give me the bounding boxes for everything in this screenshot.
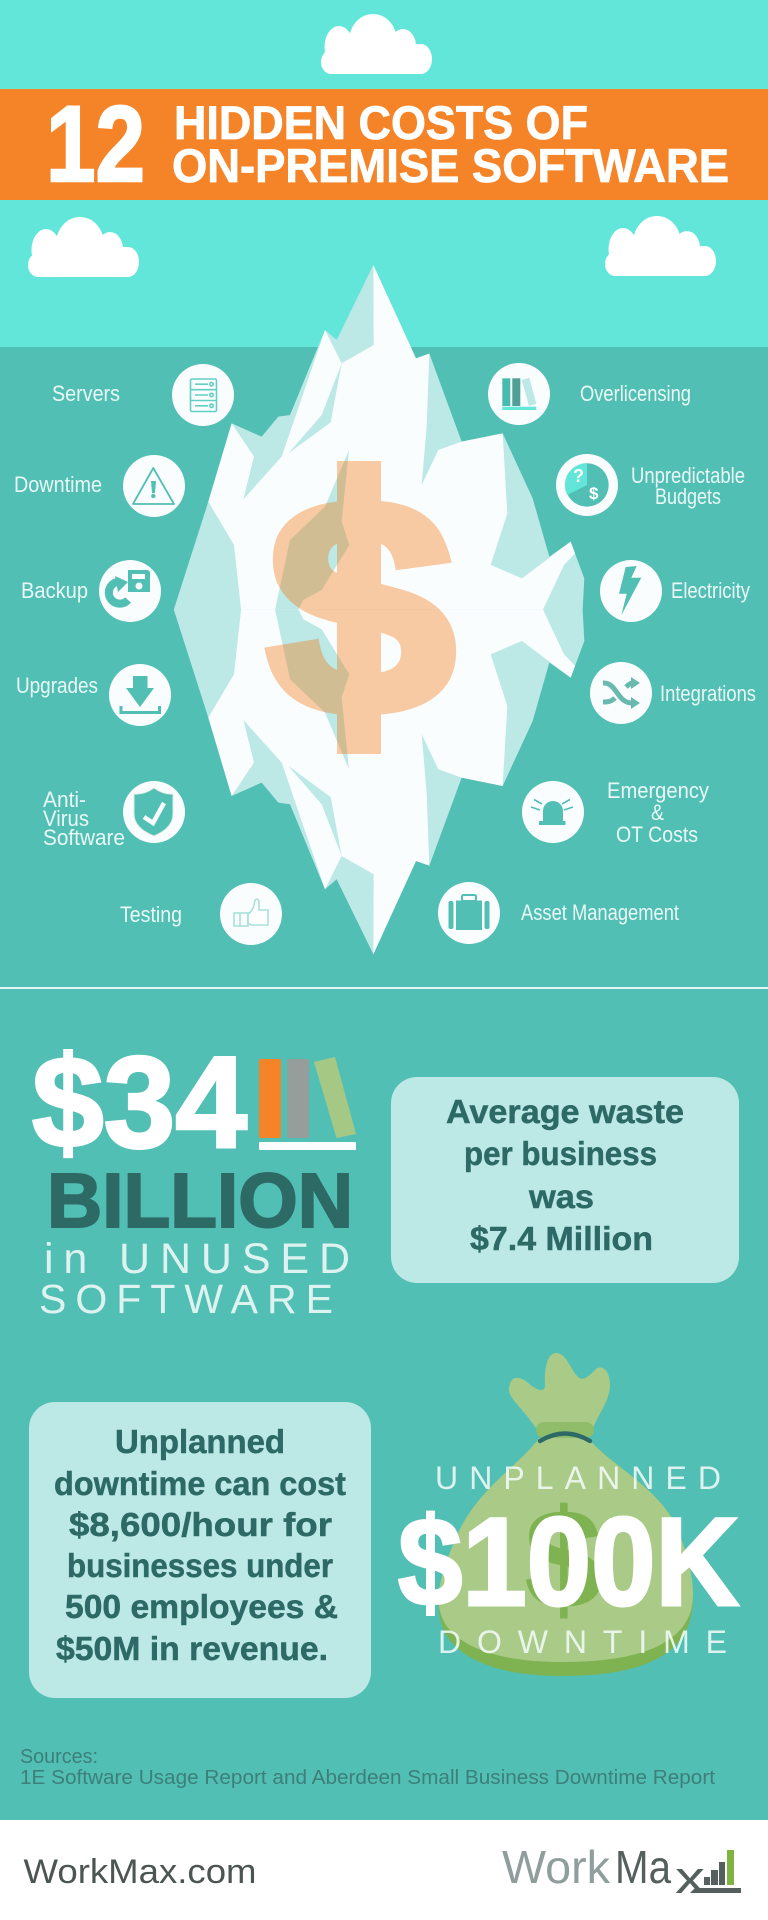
icon: money bag: $ bbox=[524, 1480, 603, 1639]
item: Testing bbox=[120, 883, 282, 945]
card: average waste bbox=[391, 1077, 739, 1283]
in unused: in UNUSED bbox=[44, 1235, 350, 1283]
item: Unpredictable Budgets bbox=[556, 454, 745, 516]
icon: budget pie: ? bbox=[573, 466, 584, 486]
cloud left bbox=[28, 217, 139, 277]
card: average waste: was bbox=[528, 1178, 594, 1215]
card: average waste: Average waste bbox=[446, 1093, 684, 1130]
stat: $34 billion: $34 bbox=[32, 1029, 247, 1175]
item: Emergency & OT Costs: OT Costs bbox=[616, 822, 698, 847]
icon: lightning bolt bbox=[600, 560, 662, 622]
sources: Sources: bbox=[20, 1746, 98, 1768]
dollar sign on iceberg: $ bbox=[267, 437, 455, 779]
card: unplanned downtime cost: Unplanned bbox=[115, 1423, 285, 1460]
icon: backup disk and arrow bbox=[99, 560, 161, 622]
icon: briefcase bbox=[438, 882, 500, 944]
website: WorkMax.com bbox=[24, 1853, 256, 1891]
card: average waste: per business bbox=[464, 1135, 657, 1172]
item: Testing: Testing bbox=[120, 902, 182, 927]
logo: WorkMax: Work bbox=[502, 1841, 611, 1893]
title number 12: 12 bbox=[46, 83, 145, 204]
item: Servers bbox=[52, 364, 234, 426]
item: Overlicensing: Overlicensing bbox=[580, 381, 691, 406]
item: Anti-Virus Software bbox=[43, 781, 185, 850]
footer bbox=[0, 1820, 768, 1920]
icon: books on shelf bbox=[259, 1057, 356, 1150]
card: unplanned downtime cost bbox=[29, 1402, 371, 1698]
logo: WorkMax: x bbox=[675, 1852, 706, 1903]
software: SOFTWARE bbox=[39, 1276, 333, 1322]
icon: books bbox=[488, 363, 550, 425]
item: Backup bbox=[21, 560, 161, 622]
item: Downtime: Downtime bbox=[14, 472, 102, 497]
stat: money bag with $100K bbox=[398, 1353, 739, 1676]
item: Backup: Backup bbox=[21, 578, 88, 603]
divider bbox=[0, 987, 768, 989]
unplanned: UNPLANNED bbox=[435, 1460, 721, 1496]
card: unplanned downtime cost: $50M in revenue. bbox=[56, 1630, 328, 1667]
stat: $34 billion bbox=[32, 1029, 356, 1322]
icon: server rack bbox=[172, 364, 234, 426]
icon: warning triangle bbox=[123, 455, 185, 517]
item: Electricity: Electricity bbox=[671, 578, 750, 603]
item: Asset Management bbox=[438, 882, 679, 944]
card: average waste: $7.4 Million bbox=[470, 1220, 653, 1257]
cloud top centre bbox=[321, 14, 432, 74]
title banner bbox=[0, 83, 768, 204]
icon: money bag bbox=[439, 1353, 693, 1676]
logo: WorkMax bbox=[502, 1841, 741, 1903]
iceberg bbox=[174, 265, 584, 954]
icon: shuffle arrows bbox=[590, 662, 652, 724]
sky background bbox=[0, 0, 768, 347]
item: Asset Management: Asset Management bbox=[521, 900, 679, 925]
title line 1: HIDDEN COSTS OF bbox=[174, 96, 588, 149]
item: Upgrades bbox=[16, 664, 171, 726]
card: unplanned downtime cost: downtime can cost bbox=[54, 1465, 346, 1502]
card: unplanned downtime cost: businesses under bbox=[67, 1547, 333, 1584]
downtime: DOWNTIME bbox=[438, 1624, 727, 1660]
icon: shield bbox=[123, 781, 185, 843]
item: Overlicensing bbox=[488, 363, 691, 425]
item: Anti-Virus Software: Virus bbox=[43, 806, 89, 831]
logo: WorkMax: Ma bbox=[615, 1841, 671, 1893]
item: Unpredictable Budgets: Unpredictable bbox=[631, 463, 745, 488]
card: unplanned downtime cost: $8,600/hour for bbox=[69, 1506, 332, 1543]
title line 2: ON-PREMISE SOFTWARE bbox=[172, 139, 729, 192]
item: Emergency & OT Costs: Emergency bbox=[607, 778, 709, 803]
icon: thumbs up bbox=[220, 883, 282, 945]
water background bbox=[0, 347, 768, 1820]
icon: budget pie: $ bbox=[589, 484, 599, 503]
sources bbox=[20, 1746, 715, 1789]
item: Integrations bbox=[590, 662, 756, 724]
item: Unpredictable Budgets: Budgets bbox=[655, 484, 721, 509]
item: Electricity bbox=[600, 560, 750, 622]
card: unplanned downtime cost: 500 employees & bbox=[65, 1588, 338, 1625]
icon: siren bbox=[522, 781, 584, 843]
item: Upgrades: Upgrades bbox=[16, 673, 98, 698]
icon: download arrow bbox=[109, 664, 171, 726]
sources: 1E Software Usage Report and Aberdeen Small Business Downtime Report bbox=[20, 1767, 715, 1789]
item: Anti-Virus Software: Software bbox=[43, 825, 125, 850]
item: Emergency & OT Costs bbox=[522, 778, 709, 847]
cloud right bbox=[605, 216, 716, 276]
icon: budget pie bbox=[556, 454, 618, 516]
$100K: $100K bbox=[398, 1493, 739, 1632]
item: Anti-Virus Software: Anti- bbox=[43, 787, 86, 812]
billion: BILLION bbox=[47, 1158, 353, 1244]
item: Downtime bbox=[14, 455, 185, 517]
item: Servers: Servers bbox=[52, 381, 120, 406]
item: Emergency & OT Costs: & bbox=[651, 800, 664, 825]
